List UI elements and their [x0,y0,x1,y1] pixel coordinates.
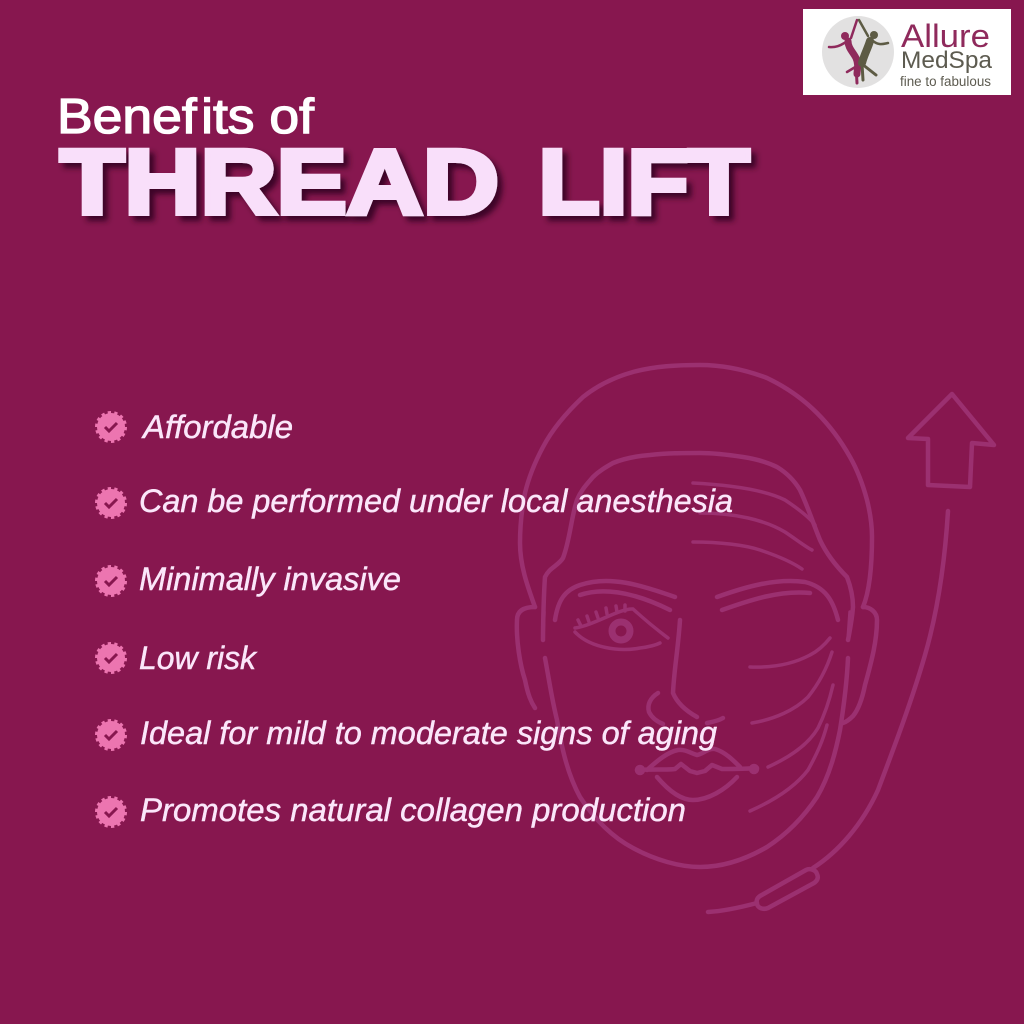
ears [517,607,535,708]
benefits list [96,409,733,828]
logo wordmark: Allure [901,18,990,54]
heading line: Benefits of: Benef its of [57,90,314,144]
logo wordmark [900,18,993,89]
lips [637,764,757,773]
cheek wrinkles [750,638,833,811]
thread line with needle [708,511,948,912]
heading line: THREAD LIFT: LIFT [538,132,750,234]
logo wordmark: fine to fabulous [900,74,991,89]
heading line: THREAD LIFT: THREAD [60,132,499,234]
nose [673,620,697,717]
logo emblem [822,16,894,88]
list item: minimally invasive: Minimally invasive [139,561,401,597]
list item: local anesthesia: Can be performed under local anesthesia [139,483,733,519]
icon: upward arrow [908,394,994,487]
list item: signs of aging: Ideal for mild to moderate signs of aging [140,715,717,751]
illustration: face line art [517,365,877,867]
list item: Affordable: Affordable [141,409,293,445]
eye [575,605,668,649]
logo [803,9,1011,95]
logo wordmark: MedSpa [901,47,993,74]
list item: collagen production: Promotes natural collagen production [140,792,686,828]
heading [57,90,750,234]
heading line: THREAD LIFT [60,132,750,234]
forehead wrinkles [693,483,815,569]
jaw [545,658,848,867]
list item: low risk: Low risk [139,640,258,676]
eyebrows [555,581,675,620]
